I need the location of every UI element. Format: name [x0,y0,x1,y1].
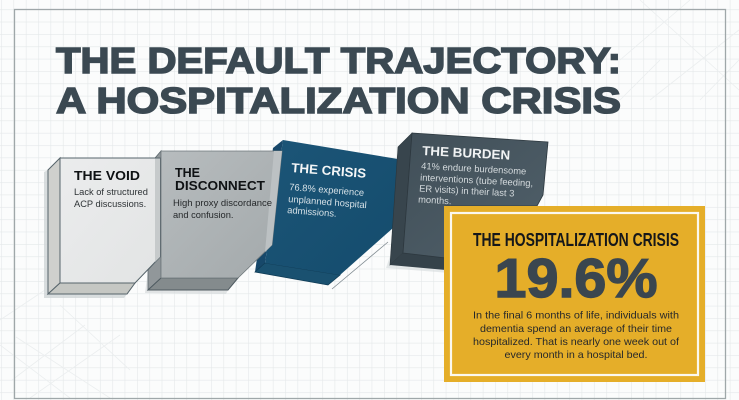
heading: the void: THE VOID [74,169,140,183]
title: A HOSPITALIZATION CRISIS [56,80,621,121]
text: the burden [418,160,533,206]
callout text: dementia spend an average of their time [480,324,672,335]
text: the burden: months. [418,194,452,206]
text: the void: Lack of structured [74,187,148,197]
panel: the crisis [255,140,398,289]
callout text: every month in a hospital bed. [504,350,648,361]
callout text: hospitalized. That is nearly one week out of [473,337,679,348]
text: the burden: interventions (tube feeding, [420,172,533,188]
heading: the burden: THE BURDEN [422,143,511,163]
text: the disconnect: High proxy discordance [173,198,272,208]
text: the crisis: 76.8% experience [289,181,365,198]
heading: the disconnect: THE [175,166,200,180]
text: the crisis: unplanned hospital [288,193,367,210]
text: the crisis [287,181,367,219]
panel: the disconnect [145,151,282,294]
text: the burden: ER visits) in their last 3 [419,183,515,198]
title [56,40,621,121]
callout text [473,310,679,361]
panel: the burden [386,133,548,273]
heading: the crisis: THE CRISIS [291,160,367,181]
text: the burden: 41% endure burdensome [421,160,527,177]
callout text: In the final 6 months of life, individuals with [473,310,679,322]
big number: 19.6%: 19.6% [494,247,658,309]
title: THE DEFAULT TRAJECTORY: [56,40,621,81]
text: the crisis: admissions. [287,204,337,219]
text: the disconnect: and confusion. [173,210,233,220]
callout: hospitalization crisis [444,206,705,382]
text: the void: ACP discussions. [74,199,146,209]
panel: the void [44,158,160,298]
callout heading: THE HOSPITALIZATION CRISIS [473,230,679,250]
heading: the disconnect: DISCONNECT [175,179,265,193]
